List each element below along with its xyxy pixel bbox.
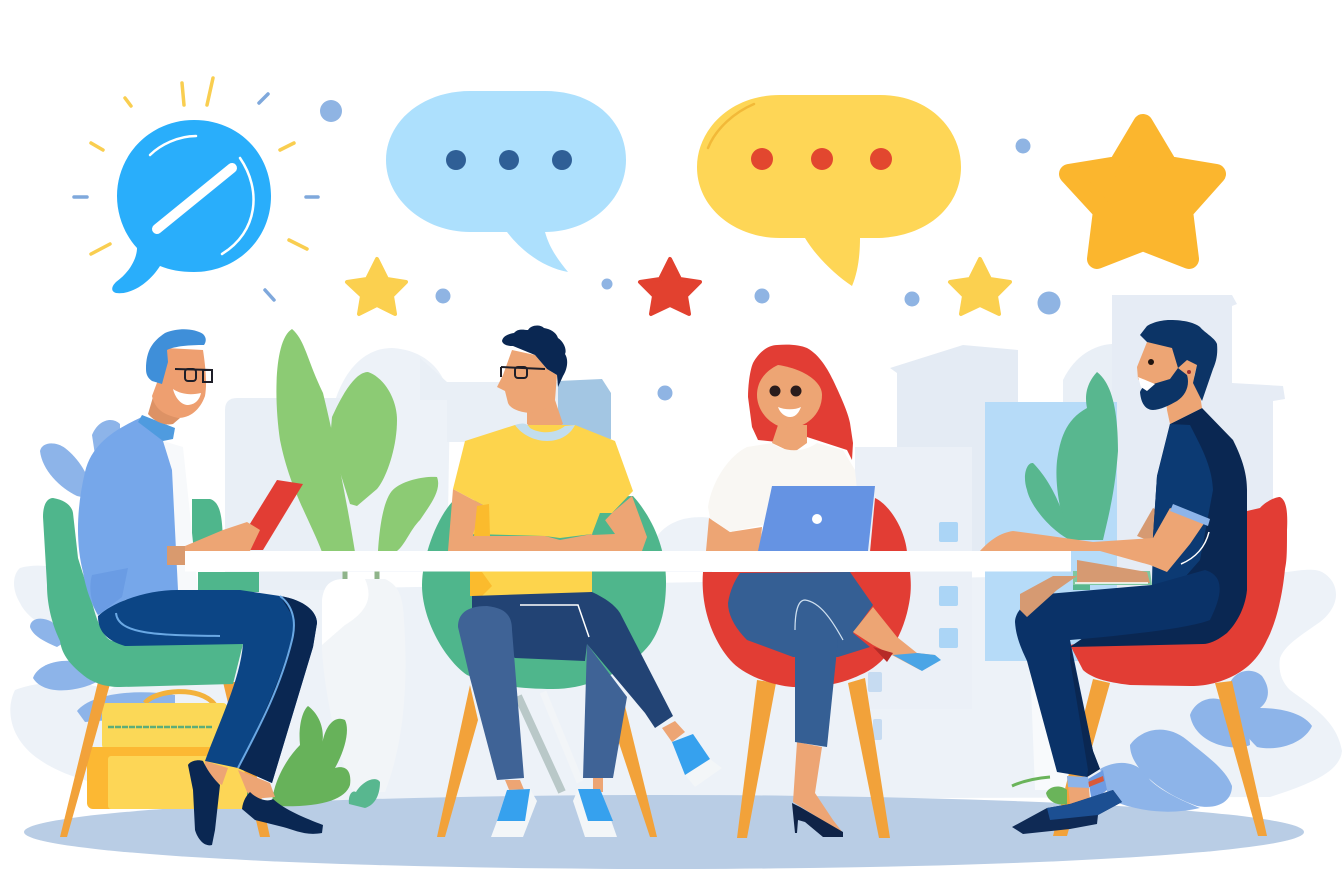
book [1073, 571, 1152, 585]
icon: small red star [640, 259, 700, 314]
neck [527, 400, 563, 436]
background: pale landscape blobs [10, 348, 1342, 800]
lap [728, 572, 873, 657]
plant: small green floor plant [217, 706, 380, 808]
back leg [583, 644, 627, 778]
hair [502, 326, 567, 387]
plant: blue leaves right [1100, 671, 1312, 812]
face [497, 350, 557, 413]
hair [1140, 320, 1217, 401]
arm [980, 508, 1205, 572]
table top [185, 551, 1071, 572]
ankles [505, 721, 685, 792]
icon: small yellow star right [950, 259, 1010, 314]
glasses [175, 369, 212, 382]
floor ellipse [24, 795, 1304, 869]
background: city buildings [225, 295, 1285, 790]
person: man in yellow shirt [448, 326, 722, 837]
chair: green centre [422, 496, 666, 837]
chair: green left [43, 498, 270, 837]
near ankle [1067, 776, 1090, 804]
shirt cuff [1170, 504, 1210, 526]
laptop [758, 486, 875, 551]
front leg [458, 606, 524, 780]
mouth [1138, 377, 1155, 391]
icon: small yellow star left [347, 259, 406, 314]
ankles [205, 761, 275, 799]
neck [772, 425, 807, 453]
chair: red right [1053, 497, 1287, 836]
face [757, 365, 822, 428]
neck [148, 397, 180, 425]
blue heel [893, 653, 941, 671]
small sprig [1012, 777, 1067, 805]
person: man with glasses and tablet [78, 329, 323, 845]
glasses [501, 367, 545, 378]
lower trousers [472, 592, 673, 728]
hair [748, 345, 853, 460]
front leg [795, 600, 838, 747]
person: woman with laptop [706, 345, 941, 837]
black heel [792, 803, 843, 837]
mouth [173, 389, 201, 405]
tablet [247, 480, 303, 550]
shoes [491, 789, 537, 837]
arms [448, 489, 647, 551]
icon: blue chat bubble with sun rays [74, 78, 318, 300]
far ankle [1088, 770, 1107, 802]
icon: light blue speech bubble [386, 91, 626, 272]
person: bearded man [980, 320, 1247, 834]
shirt [708, 443, 857, 532]
legs [1015, 570, 1220, 777]
shirt [453, 425, 633, 538]
raised leg [853, 607, 935, 670]
icon: yellow speech bubble [697, 95, 961, 286]
forearm and hand [167, 522, 260, 565]
trousers [98, 590, 317, 783]
beard [1140, 368, 1188, 410]
shoes [1012, 790, 1122, 834]
shirt shade [470, 504, 492, 596]
chair: red centre-right [703, 498, 911, 838]
face [152, 348, 206, 418]
face [1137, 342, 1197, 401]
icon: large gold star [1069, 124, 1216, 259]
collar [515, 424, 575, 441]
far arm [1137, 508, 1175, 545]
plant: green plant right [1025, 372, 1118, 590]
lower leg [793, 742, 843, 833]
jacket collar [138, 415, 175, 441]
torso [1070, 408, 1247, 647]
white shirt [163, 441, 198, 592]
shoes [188, 760, 220, 845]
plant: green leaves with white vase [276, 329, 438, 792]
plant: blue leaves left [30, 420, 175, 722]
hair [146, 329, 206, 384]
decorative dots [320, 100, 1060, 400]
chair gap [592, 513, 615, 535]
hand on knee [1020, 576, 1077, 617]
shirt front [1152, 424, 1213, 590]
jacket [78, 417, 178, 615]
neck [1165, 375, 1202, 424]
trouser highlight [520, 605, 589, 637]
yellow bag [87, 692, 247, 809]
arm [706, 518, 762, 551]
shirt highlight [1181, 532, 1209, 564]
